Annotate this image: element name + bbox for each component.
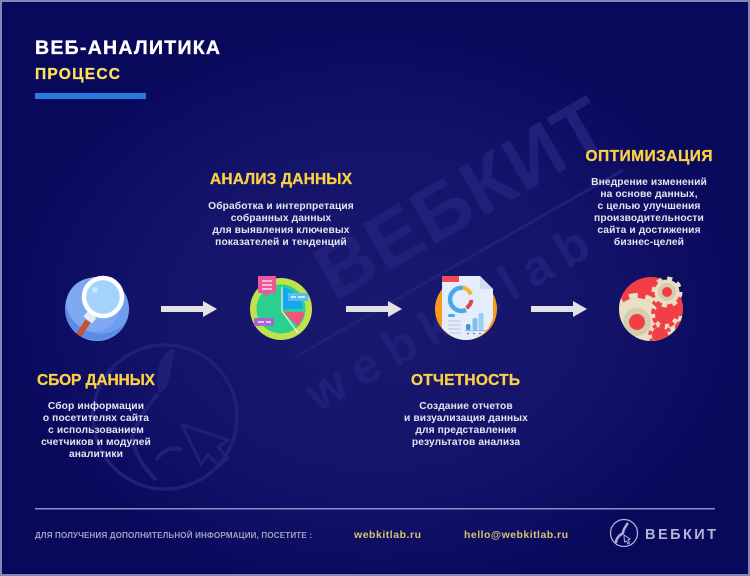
step description xyxy=(208,200,354,248)
footer logo xyxy=(610,520,716,546)
step description: Обработка и интерпретация xyxy=(208,200,354,212)
step description: результатов анализа xyxy=(412,437,520,448)
step: отчетность xyxy=(404,372,528,448)
step description: Сбор информации xyxy=(48,400,144,412)
step description: с целью улучшения xyxy=(598,201,700,212)
step: отчетность: ОТЧЕТНОСТЬ xyxy=(411,372,520,389)
step description: с использованием xyxy=(48,425,144,436)
step description: на основе данных, xyxy=(600,189,698,200)
step description xyxy=(591,177,707,248)
step description: Создание отчетов xyxy=(419,401,513,412)
logo wordmark: ВЕБКИТ xyxy=(645,527,716,543)
step description xyxy=(41,400,151,460)
step description: сайта и достижения xyxy=(597,225,701,236)
arrow 1 xyxy=(161,301,217,317)
icon: pie chart xyxy=(250,276,312,340)
step description xyxy=(404,401,528,448)
step description: для представления xyxy=(415,425,517,436)
icon: logo globe xyxy=(610,520,638,546)
arrow 2 xyxy=(346,301,402,317)
title: ВЕБ-АНАЛИТИКА xyxy=(35,37,220,59)
arrow 3 xyxy=(531,301,587,317)
step description: для выявления ключевых xyxy=(212,225,350,236)
step: анализ данных: АНАЛИЗ ДАННЫХ xyxy=(210,171,353,188)
step description: счетчиков и модулей xyxy=(41,437,151,448)
step description: аналитики xyxy=(69,449,123,460)
step: сбор данных: СБОР ДАННЫХ xyxy=(37,372,156,389)
watermark: diagonal line xyxy=(295,170,623,357)
watermark: brand name: ВЕБКИТ xyxy=(300,80,622,317)
step description: Внедрение изменений xyxy=(591,177,707,188)
footer divider xyxy=(35,508,715,510)
step description: и визуализация данных xyxy=(404,413,528,424)
icon: report document xyxy=(435,276,497,340)
step: анализ данных xyxy=(208,171,354,248)
step description: о посетителях сайта xyxy=(43,413,149,424)
step description: собранных данных xyxy=(231,212,331,224)
footer email: hello@webkitlab.ru xyxy=(464,529,568,541)
subtitle: ПРОЦЕСС xyxy=(35,66,120,83)
step: оптимизация xyxy=(586,148,712,248)
footer website: webkitlab.ru xyxy=(353,529,421,541)
icon: gears xyxy=(619,276,683,341)
watermark: globe logo xyxy=(93,345,237,489)
icon: magnifier on blue circle xyxy=(65,277,129,341)
footer note: ДЛЯ ПОЛУЧЕНИЯ ДОПОЛНИТЕЛЬНОЙ ИНФОРМАЦИИ, ПОСЕТИТЕ : xyxy=(35,531,312,540)
watermark: domain: webkitlab xyxy=(295,215,599,423)
step: сбор данных xyxy=(37,372,156,460)
title accent bar xyxy=(35,93,146,99)
step description: бизнес-целей xyxy=(614,236,684,248)
step description: производительности xyxy=(594,213,704,224)
step: оптимизация: ОПТИМИЗАЦИЯ xyxy=(586,148,712,165)
step description: показателей и тенденций xyxy=(215,237,347,248)
